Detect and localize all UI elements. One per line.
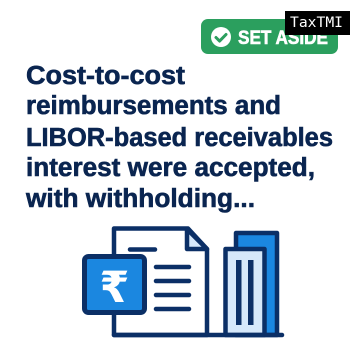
title [25,62,333,213]
watermark: TaxTMI: TaxTMI [290,15,343,31]
title: LIBOR-based receivables [26,124,333,152]
baseline [114,333,282,337]
icon: building [226,233,277,335]
title: reimbursements and [26,92,281,120]
title: Cost-to-cost [26,62,186,90]
icon: rupee card [84,256,144,313]
badge label: SET ASIDE [238,28,328,49]
icon: rupee card: ₹ [100,263,129,313]
illustration: document, rupee and building [84,228,282,335]
icon: document [114,228,207,335]
badge: set aside [201,19,338,54]
title: with withholding... [25,185,255,213]
icon: check circle [211,27,231,47]
watermark: TaxTMI [285,11,350,35]
title: interest were accepted, [26,154,315,182]
